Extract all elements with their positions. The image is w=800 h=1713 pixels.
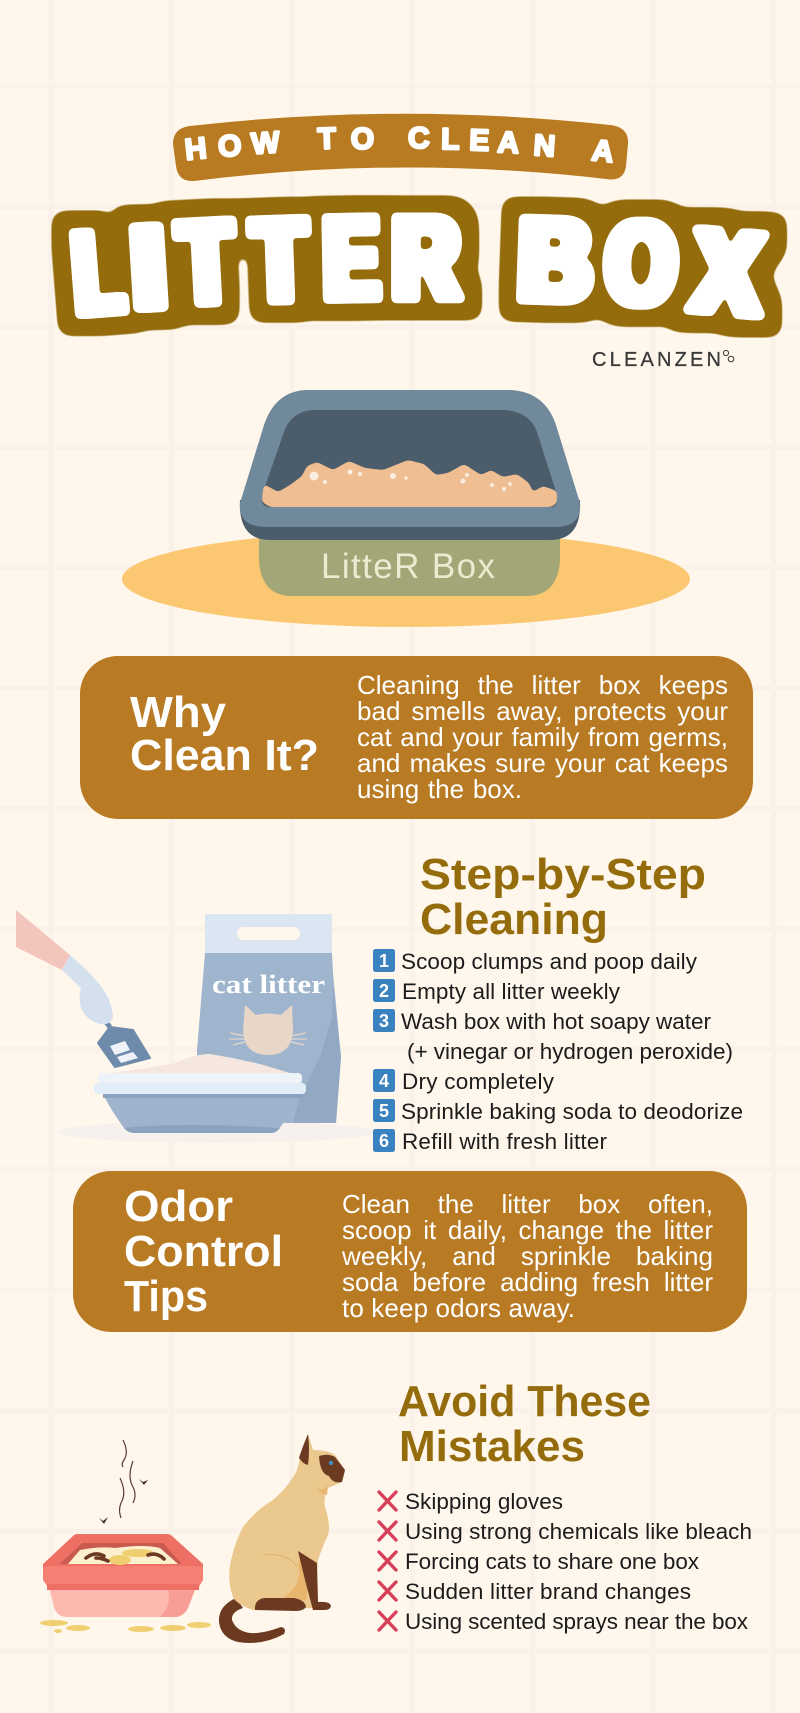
heading: avoid these mistakes: Avoid These <box>398 1377 651 1426</box>
title: litter box: B <box>517 194 594 326</box>
heading: why clean it: Clean It? <box>130 731 319 780</box>
mistakes text: Sudden litter brand changes <box>405 1579 691 1604</box>
title: litter box <box>69 194 766 339</box>
step badges: 4 <box>379 1071 389 1091</box>
step text <box>401 949 743 1154</box>
step text: Scoop clumps and poop daily <box>401 949 698 974</box>
heading: odor control tips: Control <box>124 1227 283 1276</box>
step text: Empty all litter weekly <box>402 979 621 1004</box>
title: litter box: L <box>69 206 127 338</box>
mistakes text: Forcing cats to share one box <box>405 1549 700 1574</box>
illustration: litter box: LitteR Box <box>321 547 496 586</box>
heading: odor control tips: Odor <box>124 1182 233 1231</box>
text: odor control body: scoop it daily, change the litter <box>342 1215 713 1245</box>
step badges <box>373 949 395 1152</box>
step badges: 2 <box>379 981 389 1001</box>
text: why clean it body: bad smells away, protects your <box>357 696 728 726</box>
text: why clean it body: and makes sure your cat keeps <box>357 748 728 778</box>
heading: avoid these mistakes: Mistakes <box>399 1422 585 1471</box>
step badges: 5 <box>379 1101 389 1121</box>
title: litter box: O <box>603 197 679 330</box>
illustration: litter box <box>122 390 690 627</box>
step text: Dry completely <box>402 1069 555 1094</box>
title: litter box: T <box>251 195 308 326</box>
title: litter box: X <box>689 204 766 339</box>
title banner: how to clean a: HOWTOCLEANA <box>183 122 615 169</box>
illustration: scooping cat litter <box>16 910 377 1143</box>
title: litter box: E <box>324 194 379 324</box>
step badges: 6 <box>379 1131 389 1151</box>
mistakes text: Using scented sprays near the box <box>405 1609 749 1634</box>
text: odor control body: weekly, and sprinkle baking <box>341 1241 713 1271</box>
heading: odor control tips <box>124 1182 283 1321</box>
text: why clean it body <box>357 670 728 804</box>
text: odor control body: Clean the litter box often, <box>342 1189 713 1219</box>
title: litter box: I <box>129 201 169 333</box>
mistakes text <box>405 1489 752 1634</box>
text: why clean it body: cat and your family from germs, <box>357 722 728 752</box>
title: litter box: T <box>176 196 235 328</box>
list: mistakes <box>379 1489 752 1634</box>
heading: avoid these mistakes <box>398 1377 651 1471</box>
heading: odor control tips: Tips <box>124 1272 208 1321</box>
panel: why clean it <box>80 656 753 819</box>
title banner: how to clean a <box>173 114 628 181</box>
list: cleaning steps <box>373 949 743 1154</box>
illustration: scooping cat litter: cat litter <box>212 970 325 999</box>
heading: step-by-step cleaning: Cleaning <box>420 895 608 944</box>
step text: Sprinkle baking soda to deodorize <box>401 1099 743 1124</box>
illustration: dirty litter box <box>40 1440 211 1633</box>
mistakes text: Skipping gloves <box>405 1489 563 1514</box>
panel: odor control tips <box>73 1171 747 1332</box>
heading: step-by-step cleaning: Step-by-Step <box>420 850 706 899</box>
text: odor control body <box>341 1189 713 1323</box>
step text: Wash box with hot soapy water <box>401 1009 712 1034</box>
text: odor control body: to keep odors away. <box>342 1293 575 1323</box>
x icons <box>379 1492 396 1630</box>
step badges: 1 <box>379 951 389 971</box>
text: why clean it body: using the box. <box>357 774 522 804</box>
title: litter box: R <box>393 194 459 324</box>
heading: step-by-step cleaning <box>420 850 706 944</box>
mistakes text: Using strong chemicals like bleach <box>405 1519 752 1544</box>
step text: Refill with fresh litter <box>402 1129 608 1154</box>
heading: why clean it <box>130 688 319 780</box>
illustration: siamese cat <box>219 1434 345 1643</box>
step badges: 3 <box>379 1011 389 1031</box>
text: why clean it body: Cleaning the litter box keeps <box>357 670 728 700</box>
step text: (+ vinegar or hydrogen peroxide) <box>407 1039 733 1064</box>
logo: cleanzen: CLEANZEN <box>592 349 721 371</box>
text: odor control body: soda before adding fresh litter <box>342 1267 713 1297</box>
heading: why clean it: Why <box>130 688 227 737</box>
